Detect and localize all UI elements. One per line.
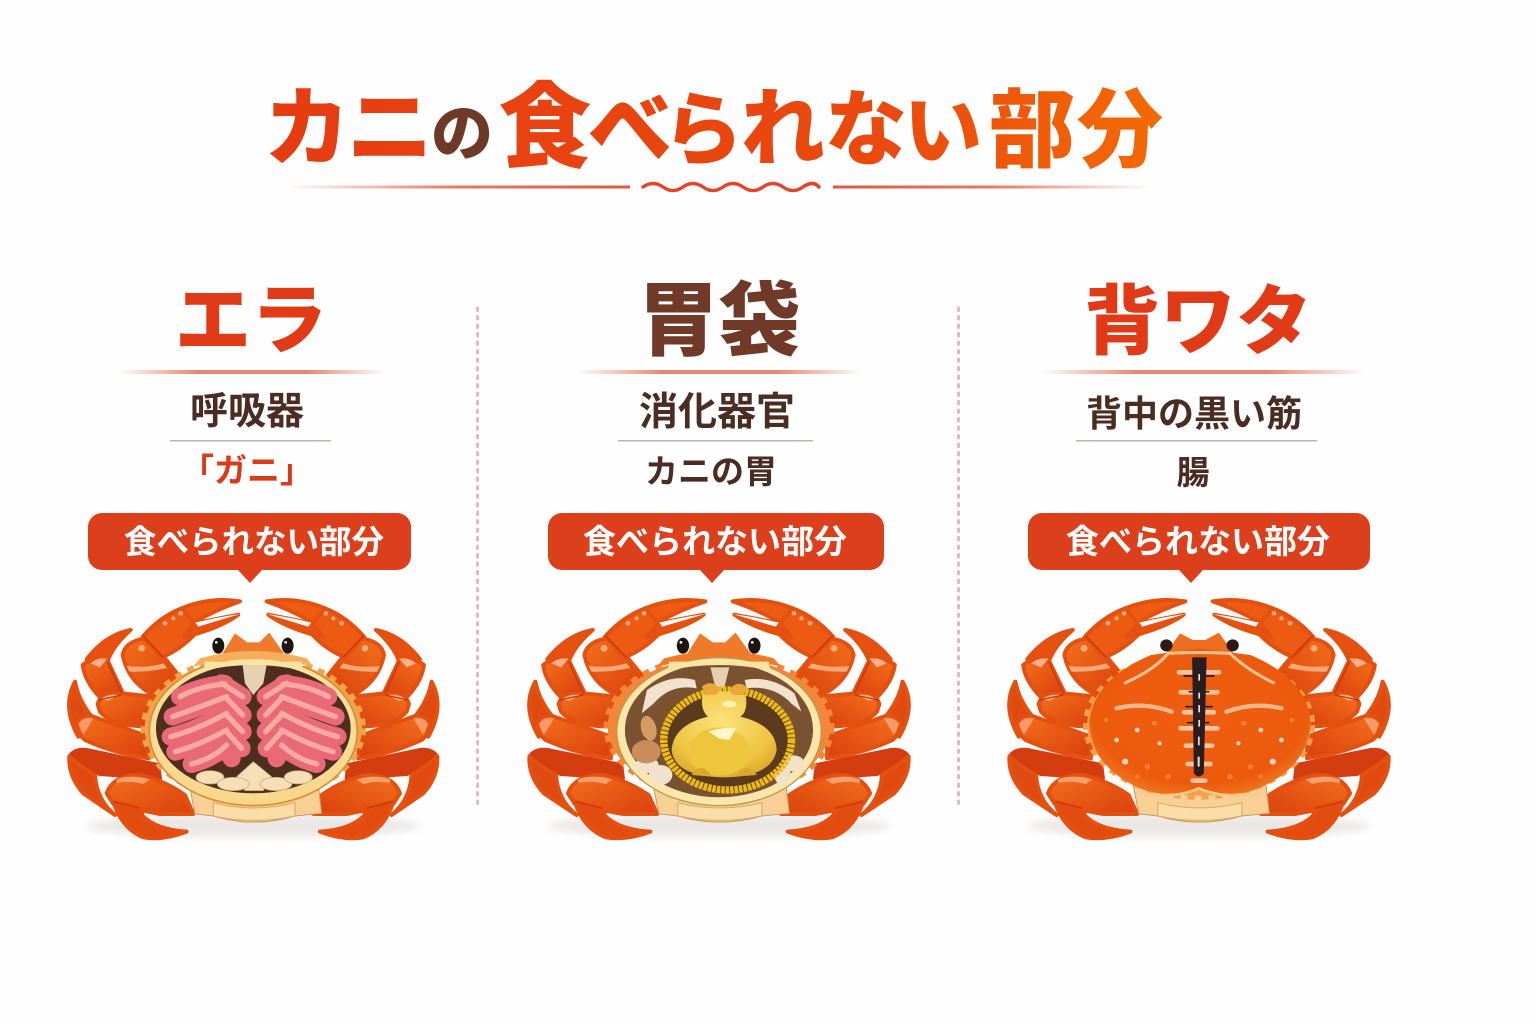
panel: back vein (1009, 280, 1389, 838)
heading: gills: エラ (175, 279, 327, 364)
title (264, 76, 1163, 180)
callout: inedible part: 食べられない部分 (583, 523, 847, 560)
callout: inedible part (548, 513, 884, 583)
heading: stomach sac: 胃袋 (638, 277, 800, 367)
title: カ (264, 81, 350, 177)
heading rule (576, 370, 862, 374)
title: 食 (498, 76, 592, 180)
label: gani: 「ガニ」 (181, 452, 313, 489)
back vein (1184, 657, 1214, 776)
title underline with wave (285, 184, 1151, 190)
title: ら (663, 86, 743, 175)
crab illustration: open shell showing gills (69, 600, 438, 838)
title: い (904, 87, 982, 175)
thin rule (1076, 440, 1317, 442)
heading rule (1040, 370, 1366, 374)
column dividers (478, 308, 958, 808)
left gill (171, 683, 243, 764)
title: ニ (347, 81, 433, 177)
stomach sac (672, 691, 777, 777)
callout: inedible part: 食べられない部分 (1066, 523, 1330, 560)
stomach ring (664, 690, 791, 790)
heading: back vein: 背ワタ (1084, 280, 1312, 365)
title: れ (741, 82, 825, 176)
label: black line on back: 背中の黒い筋 (1086, 393, 1302, 434)
title: の (431, 100, 493, 169)
title: な (825, 85, 907, 176)
label: crab stomach: カニの胃 (645, 453, 777, 490)
title: 部 (989, 83, 1075, 179)
title: べ (588, 82, 672, 176)
crab illustration: open shell showing stomach (529, 600, 909, 838)
callout: inedible part: 食べられない部分 (124, 524, 384, 560)
crab illustration: closed shell showing back vein (1009, 600, 1389, 838)
thin rule (618, 440, 813, 442)
callout: inedible part (88, 513, 411, 583)
label: digestive organ: 消化器官 (639, 391, 795, 434)
label: intestine: 腸 (1176, 454, 1210, 491)
heading rule (118, 370, 386, 374)
title: 分 (1077, 83, 1163, 179)
callout: inedible part (1028, 513, 1370, 583)
right gill (266, 683, 338, 764)
label: respiratory organ: 呼吸器 (190, 391, 304, 433)
thin rule (170, 440, 331, 442)
panel: gills (69, 279, 438, 838)
panel: stomach sac (529, 277, 909, 838)
